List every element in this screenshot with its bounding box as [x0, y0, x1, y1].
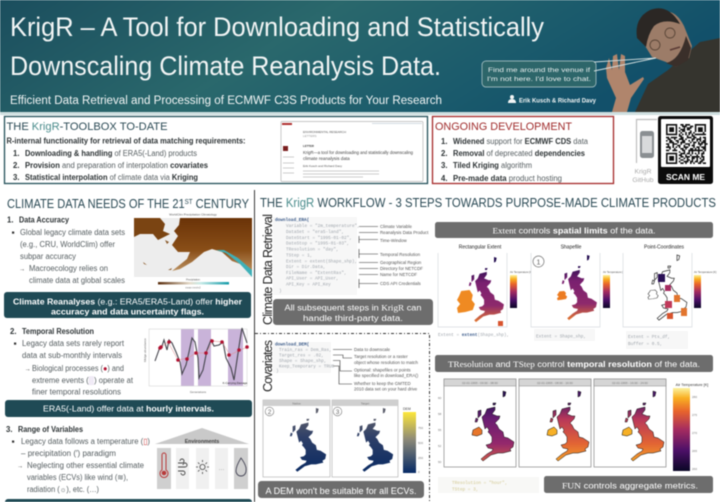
icon: wind: [178, 459, 187, 475]
item 1: data accuracy: (e.g., CRU, WorldClim) offer: [20, 240, 115, 249]
code block: download_ERA: FileName = "ExtentRas",: [286, 271, 347, 276]
code block: download_ERA: DataSet = "era5-land",: [286, 230, 344, 235]
legend: air temperature: Air Temperature [K]: [676, 383, 708, 387]
diagram: environments temple: [155, 428, 249, 489]
icon: thermometer: [160, 453, 168, 477]
map panels: native and target DEM: Native: [292, 402, 301, 406]
map panels: native and target DEM: 2: [268, 409, 272, 416]
map panels: three-hourly air temperature: 50: [438, 460, 442, 464]
annotations: download_DEM arguments: like specified in download_ERA(): [354, 373, 419, 378]
item 1: data accuracy: →: [19, 266, 25, 273]
paper thumbnail: LETTER: [303, 144, 314, 148]
annotations: download_ERA arguments: Reanalysis Data Product: [380, 230, 429, 235]
code block: download_ERA: Dir = Dir.Data,: [286, 265, 326, 270]
toolbox list: Provision and preparation of interpolation covariates: [25, 161, 209, 170]
column divider: [254, 190, 256, 502]
toolbox list: [13, 149, 209, 182]
code block: download_DEM: [273, 342, 335, 374]
legend: air temperature: 270: [692, 431, 697, 435]
speech bubble: Find me around the venue if: [488, 67, 590, 74]
development list: 2.: [441, 149, 448, 158]
code block: download_ERA: download_ERA(: [275, 218, 309, 223]
code block: download_DEM: ): [276, 369, 279, 374]
panel heading: ONGOING DEVELOPMENT: [435, 121, 572, 133]
item 1: data accuracy: Data Accuracy: [19, 216, 70, 224]
code block: download_ERA: API_User = API_User,: [286, 276, 339, 282]
legend: DEM: 750: [418, 426, 423, 430]
paper thumbnail: [281, 122, 423, 182]
code block: download_ERA: Extent = extent(Shape_shp),: [286, 260, 357, 264]
subtitle: Efficient Data Retrieval and Processing of ECMWF C3S Products for Your Research: [10, 95, 442, 107]
item 2: temporal resolution: Biological processes (●) and: [32, 364, 124, 373]
icon: water drop: [236, 458, 246, 476]
paper thumbnail: LETTERS: [303, 134, 317, 138]
code block: download_ERA: [273, 217, 360, 295]
step marker: 1: [536, 258, 541, 266]
legend: DEM: [403, 407, 423, 474]
map panels: native and target DEM: 3: [336, 409, 340, 416]
map: rectangular extent: Rectangular Extent: [459, 244, 502, 250]
requirement lead-in: R-internal functionality for retrieval of data matching requirements:: [6, 136, 246, 146]
paper thumbnail: ENVIRONMENTAL RESEARCH: [303, 130, 346, 134]
speech bubble: [482, 58, 656, 87]
code block: download_DEM: Keep_Temporary = TRUE: [279, 364, 335, 370]
speech bubble: I'm not here. I'd love to chat.: [487, 76, 591, 83]
map: Alaska precipitation climatology: [134, 212, 252, 290]
legend: DEM: DEM: [403, 407, 411, 411]
map panels: three-hourly air temperature: 60: [438, 396, 442, 400]
item 3: range of variables: variables (ECVs) like wind (≋),: [27, 473, 128, 482]
other variables: …: [218, 466, 224, 472]
item 3: range of variables: 3.: [6, 425, 13, 434]
item 2: temporal resolution: Legacy data sets rarely report: [22, 339, 125, 348]
annotations: download_ERA arguments: Climate Variable: [380, 224, 412, 229]
map panels: three-hourly air temperature: 02-01-1995 - 16:00 - 24:00: [612, 381, 648, 385]
annotations: download_DEM arguments: object whose resolution to match: [354, 360, 419, 365]
map: shapefile: [531, 244, 626, 327]
item 2: temporal resolution: Temporal Resolution: [22, 327, 94, 336]
legend: air temperature: 280: [692, 395, 697, 399]
title: [10, 12, 544, 81]
QR code: SCAN ME: [666, 173, 706, 182]
title: KrigR – A Tool for Downloading and Statistically: [10, 12, 544, 42]
map panels: three-hourly air temperature: 02-01-1995 - 00:00 - 08:00: [462, 381, 498, 385]
section heading: climate data needs: CLIMATE DATA NEEDS OF THE 21: [7, 197, 208, 211]
map panels: three-hourly air temperature: [438, 379, 666, 467]
legend: DEM: 250: [418, 456, 423, 460]
toolbox list: 3.: [13, 173, 20, 182]
item 2: temporal resolution: [10, 327, 134, 396]
code block: download_ERA: Variable = "2m_temperature",: [286, 224, 360, 229]
development list: Pre-made data product hosting: [453, 174, 562, 183]
annotations: download_ERA arguments: [359, 224, 429, 288]
annotations: download_ERA arguments: Temporal Resolution: [380, 252, 421, 257]
legend: DEM: 0: [418, 470, 420, 474]
item 3: range of variables: – precipitation (′) paradigm: [21, 449, 116, 458]
panel: ongoing development: [432, 116, 614, 184]
map: rectangular extent: Air Temperature [K]: [510, 270, 533, 274]
development list: [441, 137, 589, 183]
QR code: [658, 116, 713, 184]
diagram: environments temple: Environments: [185, 439, 219, 445]
callout: climate reanalyses: accuracy and data uncertainty flags.: [51, 308, 204, 316]
annotations: download_DEM arguments: Whether to keep the GMTED: [354, 381, 411, 386]
item 3: range of variables: Neglecting other essential climate: [27, 461, 144, 470]
item 2: temporal resolution: extreme events (▒) operate at: [32, 376, 134, 385]
code: extent variants: Buffer = 0.5,: [628, 342, 662, 347]
code block: download_ERA: API_Key = API_Key: [286, 282, 331, 288]
item 1: data accuracy: Macroecology relies on: [29, 264, 108, 273]
item 1: data accuracy: [7, 216, 125, 285]
map: point coordinates: Air Temperature [K]: [694, 270, 717, 274]
annotations: download_ERA arguments: Directory for NETCDF: [380, 266, 423, 271]
step label: covariates: Covariates: [261, 340, 275, 392]
code block: download_DEM: Train_ras = Dem_Ras,: [279, 348, 332, 353]
callout: FUN: [544, 476, 713, 493]
legend: [510, 275, 517, 308]
map: point coordinates: Point-Coordinates: [644, 244, 685, 250]
callout: DEM suitability: [258, 481, 424, 498]
item 2: temporal resolution: data at sub-monthly intervals: [22, 351, 122, 360]
item 1: data accuracy: subpar accuracy: [20, 252, 76, 261]
github link with phone icon: KrigR: [634, 168, 652, 176]
authors: [508, 95, 596, 104]
annotations: download_ERA arguments: Geographical Region: [380, 260, 422, 265]
map panels: three-hourly air temperature: 58: [438, 412, 442, 416]
github link with phone icon: GitHub: [632, 177, 654, 184]
map: point coordinates: [623, 244, 717, 327]
legend: [603, 275, 610, 308]
map panels: native and target DEM: [263, 400, 398, 477]
legend: air temperature: 260: [692, 467, 697, 471]
callout: third-party data: [273, 299, 433, 325]
item 2: temporal resolution: finer temporal resolutions: [32, 388, 121, 396]
callout: extent: Extent controls spatial limits of the data.: [492, 226, 656, 236]
callout: hourly intervals: ERA5(-Land) offer data at hourly intervals.: [43, 404, 214, 414]
legend: [694, 275, 701, 308]
callout: temporal resolution: [435, 355, 713, 372]
icon: sun: [196, 460, 209, 474]
step markers: [265, 407, 342, 416]
item 1: data accuracy: climate data at global scales: [29, 276, 125, 285]
code: temporal settings: TStep = 3,: [452, 488, 478, 492]
callout: hourly intervals: [5, 400, 252, 417]
map panels: native and target DEM: Target: [361, 402, 369, 406]
toolbox list: 1.: [13, 149, 20, 158]
code block: download_ERA: DateStop = "1995-01-03",: [286, 242, 349, 246]
code: extent variants: Extent = Shape_shp,: [536, 334, 586, 340]
map panels: three-hourly air temperature: 02-01-1995 - 08:00 - 16:00: [537, 381, 573, 385]
step label: climate data retrieval: Climate Data Retrieval: [261, 214, 275, 325]
paper thumbnail: KrigR—a tool for downloading and statistically downscaling: [303, 150, 413, 155]
callout: DEM suitability: A DEM won't be suitable for all ECVs.: [266, 486, 416, 496]
legend: DEM: 500: [418, 441, 423, 445]
item 3: range of variables: Legacy data follows a temperature (▯): [21, 437, 150, 446]
callout: essential climate variables: [5, 499, 252, 502]
development list: 1.: [441, 137, 448, 146]
photo: presenter waving: [606, 8, 720, 112]
code: temporal settings: TResolution = "hour",: [452, 481, 507, 486]
item 3: range of variables: radiation (☼), etc. (…): [27, 485, 99, 494]
annotations: download_DEM arguments: Target resolution or a raster: [354, 354, 408, 359]
code block: download_DEM: Target_res = .02,: [279, 354, 324, 358]
paper thumbnail: Erik Kusch and Richard Davy: [303, 164, 343, 168]
map: shapefile: Shapefile: [561, 244, 582, 250]
annotations: download_DEM arguments: 2010 data set on your hard drive: [354, 386, 418, 392]
item 1: data accuracy: 1.: [7, 216, 14, 224]
annotations: download_DEM arguments: [333, 347, 419, 392]
code: temporal settings: [438, 477, 539, 493]
callout: third-party data: handle third-party data.: [303, 314, 403, 323]
annotations: download_ERA arguments: Time-Window: [380, 238, 408, 243]
legend: air temperature: 265: [692, 449, 697, 453]
chart: abundance time series with extreme events: K-Carrying Damage: [223, 381, 248, 385]
legend: air temperature: [673, 383, 708, 471]
section heading: climate data needs: ST: [185, 199, 193, 206]
code block: download_ERA: DateStart = "1995-01-02",: [286, 236, 352, 241]
code: extent variants: Extent = Pts_df,: [628, 335, 670, 340]
chart: abundance time series with extreme events: [143, 328, 249, 394]
title: Downscaling Climate Reanalysis Data.: [10, 51, 441, 81]
chart: abundance time series with extreme events: Generations: [190, 390, 207, 394]
toolbox list: 2.: [13, 161, 20, 170]
map: Alaska precipitation climatology: WorldClim Precipitation Climatology: [169, 212, 217, 216]
item 2: temporal resolution: 2.: [10, 327, 17, 336]
development list: 3.: [441, 161, 448, 170]
chart: abundance time series with extreme events: Midge abundance: [143, 338, 147, 362]
item 1: data accuracy: Global legacy climate data sets: [20, 228, 125, 237]
development list: Widened support for ECMWF CDS data: [453, 137, 589, 146]
panel: toolbox to date: [4, 116, 428, 184]
item 3: range of variables: [6, 425, 150, 494]
development list: Removal of deprecated dependencies: [453, 149, 586, 158]
code block: download_ERA: TStep = 1,: [286, 254, 312, 258]
panel heading: THE KrigR-TOOLBOX TO-DATE: [6, 121, 168, 133]
development list: 4.: [441, 174, 448, 183]
code: extent variants: Extent = extent(Shape_shp),: [438, 333, 509, 338]
annotations: download_ERA arguments: Name for NETCDF: [380, 272, 417, 277]
authors: Erik Kusch & Richard Davy: [519, 98, 596, 104]
map: shapefile: Air Temperature [K]: [603, 270, 626, 274]
callout: climate reanalyses: Climate Reanalyses (e.g.: ERA5/ERA5-Land) offer higher: [13, 298, 242, 306]
annotations: download_ERA arguments: CDS API Credentials: [380, 281, 422, 286]
item 2: temporal resolution: →: [24, 366, 31, 373]
map: Alaska precipitation climatology: Precipitation: [186, 278, 200, 282]
code block: download_ERA: ): [279, 289, 282, 294]
annotations: download_DEM arguments: Data to downscale: [354, 347, 391, 352]
callout: FUN: FUN controls aggregate metrics.: [562, 482, 698, 490]
code block: download_DEM: download_DEM(: [275, 342, 309, 348]
map panels: three-hourly air temperature: 52: [438, 444, 442, 448]
paper thumbnail: climate reanalysis data: [303, 156, 350, 161]
development list: Tiled Kriging algorithm: [453, 161, 532, 170]
map panels: three-hourly air temperature: 55: [438, 428, 442, 432]
toolbox list: Downloading & handling of ERA5(-Land) products: [25, 149, 197, 158]
item 3: range of variables: →: [17, 463, 23, 470]
callout: third-party data: All subsequent steps in KrigR can: [284, 304, 422, 312]
callout: temporal resolution: TResolution and TStep control temporal resolution of the data.: [448, 360, 700, 369]
icon: phone: [640, 131, 654, 158]
callout: climate reanalyses: [4, 292, 251, 318]
map: Alaska precipitation climatology: mean mm/m2: [185, 286, 201, 290]
code block: download_DEM: Shape = Shape_shp,: [279, 359, 326, 364]
annotations: download_DEM arguments: Optional: shapefiles or points: [354, 368, 411, 372]
github link with phone icon: [632, 120, 657, 184]
item 3: range of variables: Range of Variables: [18, 425, 84, 434]
legend: air temperature: 275: [692, 413, 697, 417]
header banner: [0, 0, 720, 115]
callout: extent: [435, 222, 713, 238]
toolbox list: Statistical interpolation of climate data via Kriging: [25, 173, 198, 182]
section heading: climate data needs: CENTURY: [193, 197, 250, 211]
code block: download_ERA: TResolution = "day",: [286, 248, 339, 252]
code: extent variants: [438, 329, 688, 349]
map: rectangular extent: [438, 244, 533, 327]
